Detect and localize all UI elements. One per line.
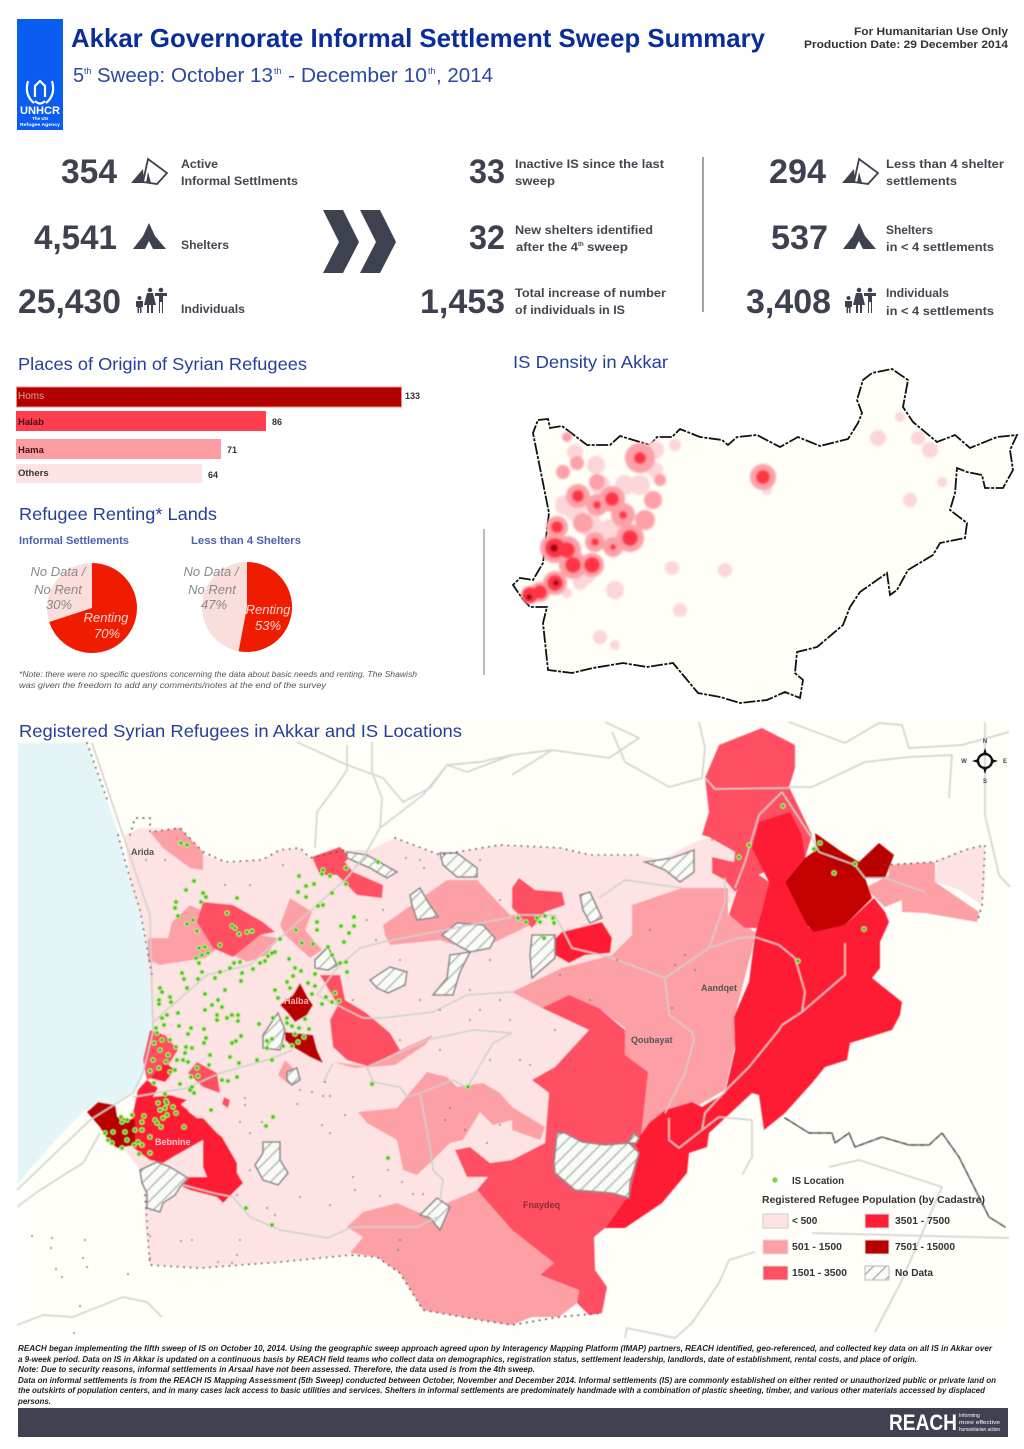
bar chart: 86 [272, 417, 282, 427]
legend [762, 1176, 985, 1280]
legend: < 500 [792, 1216, 818, 1227]
methodology text: the outskirts of population centers, and in many cases lack access to basic utilities and services. Shelters in informal settlements are predominately handmade with a combination of plastic sheeting, timber, and various other materials accessed by displaced [18, 1386, 986, 1395]
key figures: settlements under 4 shelters [746, 153, 1004, 321]
stat: new shelters: after the 4 [516, 240, 578, 254]
place labels [131, 847, 737, 1210]
header [17, 19, 1009, 130]
stat: shelters: 4,541 [34, 219, 117, 257]
place labels: Bebnine [155, 1137, 191, 1147]
cadastres 1501 to 3500 [143, 728, 812, 1315]
panel: registered refugees map [17, 720, 1010, 1340]
stat: active informal settlements: Informal Settlments [181, 174, 298, 188]
heat spots [521, 412, 947, 650]
place labels: Arida [131, 847, 155, 857]
stat: small settlement shelters: 537 [771, 219, 828, 257]
pie chart: less than 4 shelters [184, 562, 292, 652]
bar chart: 64 [208, 470, 218, 480]
subtitle: Sweep: [97, 65, 165, 87]
pie subheading right: Less than 4 Shelters [191, 535, 301, 547]
place labels: Fnaydeq [523, 1200, 560, 1210]
stat: inactive IS: sweep [515, 174, 555, 188]
icon: compass: W [961, 759, 967, 765]
stat: individuals: Individuals [181, 302, 245, 316]
REACH logo: more effective [959, 1420, 1000, 1426]
stat: small settlements: 294 [769, 153, 826, 191]
stat: small settlements [769, 153, 1004, 191]
cadastres 7501 to 15000 [87, 833, 894, 1148]
subtitle: th [428, 66, 436, 76]
scattered localities [32, 840, 712, 1333]
map background [18, 720, 1010, 1340]
legend: 1501 - 3500 [792, 1268, 847, 1279]
footer bar [18, 1408, 1008, 1437]
legend: No Data [895, 1268, 933, 1279]
methodology text: Note: Due to security reasons, informal settlements in Arsaal have not been assessed. Therefore, the data used is from the 4th sweep. [18, 1365, 535, 1374]
stat: small settlement individuals: 3,408 [746, 283, 831, 321]
stat: new shelters: sweep [587, 240, 628, 254]
icon: compass: N [983, 739, 987, 745]
heading: IS Density in Akkar [513, 352, 668, 372]
map heading: Registered Syrian Refugees in Akkar and IS Locations [19, 721, 462, 741]
pie chart: less than 4 shelters: 53% [255, 618, 281, 633]
bar chart: Others [18, 468, 49, 479]
stat: inactive IS: 33 [469, 153, 505, 191]
legend: 7501 - 15000 [895, 1242, 955, 1253]
production note: Production Date: 29 December 2014 [804, 39, 1009, 51]
heading: Refugee Renting* Lands [19, 504, 217, 524]
stat: increase of individuals: 1,453 [420, 283, 505, 321]
methodology text: a 9-week period. Data on IS in Akkar is updated on a continuous basis by REACH field teams who collect data on demographics, registration status, settlement leadership, landlords, date of establishment, rental costs, and place of origin. [18, 1355, 917, 1364]
pie chart: less than 4 shelters: Renting [246, 602, 291, 617]
pie chart: informal settlements: No Data / [31, 564, 87, 579]
legend: 3501 - 7500 [895, 1216, 950, 1227]
stat: increase of individuals: of individuals in IS [515, 303, 625, 317]
pie chart: informal settlements: Renting [84, 610, 129, 625]
stat: new shelters: th [578, 242, 584, 248]
cadastres 3501 to 7500 [127, 812, 902, 1228]
icon: compass [961, 739, 1007, 785]
bar chart [16, 387, 420, 483]
stat: small settlement individuals: in < 4 settlements [886, 304, 994, 318]
title: Akkar Governorate Informal Settlement Sweep Summary [71, 23, 766, 53]
production note [804, 26, 1009, 51]
UNHCR logo [17, 19, 63, 130]
methodology text: persons. [17, 1397, 51, 1406]
bar chart: 71 [227, 445, 237, 455]
stat: small settlement shelters: in < 4 settlements [886, 240, 994, 254]
pie chart: less than 4 shelters: No Data / [184, 564, 240, 579]
stat: small settlements: Less than 4 shelter [886, 157, 1004, 171]
production note: For Humanitarian Use Only [854, 26, 1009, 38]
bar chart: Homs [18, 391, 44, 402]
cadastres under 500 [125, 828, 735, 1268]
place labels: Qoubayat [631, 1035, 673, 1045]
stat: shelters [34, 219, 229, 257]
stat: active informal settlements: Active [181, 157, 218, 171]
stat: individuals [18, 283, 245, 321]
pie chart: informal settlements [31, 563, 137, 653]
UNHCR logo: Refugee Agency [20, 122, 61, 127]
arrow: double chevron [323, 210, 396, 273]
methodology text: REACH began implementing the fifth sweep of IS on October 10, 2014. Using the geographic sweep approach agreed upon by Interagency Mapping Platform (IMAP) partners, REACH identified, geo-referenced, and collected key data on all IS in Akkar over [18, 1344, 993, 1353]
sea [18, 743, 155, 1185]
stat: increase of individuals [420, 283, 666, 321]
stat: individuals: 25,430 [18, 283, 121, 321]
bar chart: 133 [405, 391, 420, 401]
subtitle: 5 [73, 65, 84, 87]
stat: small settlement individuals: Individuals [886, 286, 949, 300]
REACH logo: humanitarian action [959, 1427, 1000, 1433]
subtitle: th [274, 66, 282, 76]
IS location dots [105, 806, 864, 1225]
key figures: change since last sweep [420, 153, 666, 321]
stat: small settlements: settlements [886, 174, 957, 188]
bar chart: Halab [18, 417, 44, 428]
stat: inactive IS: Inactive IS since the last [515, 157, 664, 171]
subtitle [73, 65, 493, 87]
REACH logo: Informing [959, 1413, 980, 1419]
footnote [19, 670, 418, 690]
pie chart: less than 4 shelters: No Rent [188, 582, 237, 597]
stat: increase of individuals: Total increase of number [515, 286, 666, 300]
icon: compass: E [1003, 759, 1007, 765]
icon: compass: S [983, 779, 987, 785]
key figures: sweep totals [18, 153, 298, 321]
subtitle: th [84, 66, 92, 76]
methodology text: Data on informal settlements is from the REACH IS Mapping Assessment (5th Sweep) conducted between October, November and December 2014. Informal settlements (IS) are commonly established on either rented or unauthorized public or private land on [18, 1376, 996, 1385]
UNHCR logo: UNHCR [20, 105, 60, 117]
pie chart: informal settlements: 30% [46, 597, 72, 612]
panel: IS density map [513, 352, 1017, 703]
heading: Places of Origin of Syrian Refugees [18, 354, 307, 374]
stat: small settlement shelters [771, 219, 994, 257]
footnote: *Note: there were no specific questions concerning the data about basic needs and renting. The Shawish [19, 670, 418, 679]
stat: small settlement individuals [746, 283, 994, 321]
stat: small settlement shelters: Shelters [886, 223, 933, 237]
stat: active informal settlements [61, 153, 298, 191]
pie chart: informal settlements: No Rent [34, 582, 83, 597]
place labels: Halba [284, 996, 310, 1006]
panel: places of origin [16, 354, 420, 483]
legend: IS Location [792, 1176, 844, 1187]
roads [17, 722, 1010, 1338]
dotted borders [87, 743, 1005, 1325]
stat: new shelters: 32 [469, 219, 505, 257]
pie chart: informal settlements: 70% [94, 626, 120, 641]
subtitle: - December 10 [288, 65, 427, 87]
map artwork [17, 722, 1010, 1338]
panel: refugee renting lands [19, 504, 418, 690]
stat: shelters: Shelters [181, 238, 229, 252]
stat: new shelters: New shelters identified [515, 223, 653, 237]
cadastres 501 to 1500 [148, 828, 979, 1325]
stat: active informal settlements: 354 [61, 153, 117, 191]
no data cadastres [140, 850, 694, 1230]
UNHCR logo: The UN [32, 116, 48, 121]
stat: inactive IS [469, 153, 664, 191]
pie subheading left: Informal Settlements [19, 535, 129, 547]
place labels: Aandqet [701, 983, 737, 993]
footnote: was given the freedom to add any comments/notes at the end of the survey [19, 681, 327, 690]
subtitle: October 13 [171, 65, 273, 87]
bar chart: Hama [18, 445, 45, 456]
REACH logo: REACH [889, 1410, 957, 1435]
methodology text [17, 1344, 996, 1406]
pie chart: less than 4 shelters: 47% [201, 597, 227, 612]
legend: 501 - 1500 [792, 1242, 842, 1253]
stat: new shelters [469, 219, 653, 257]
subtitle: , 2014 [436, 65, 493, 87]
governorate outline [513, 369, 1017, 703]
legend: Registered Refugee Population (by Cadastre) [762, 1195, 985, 1206]
